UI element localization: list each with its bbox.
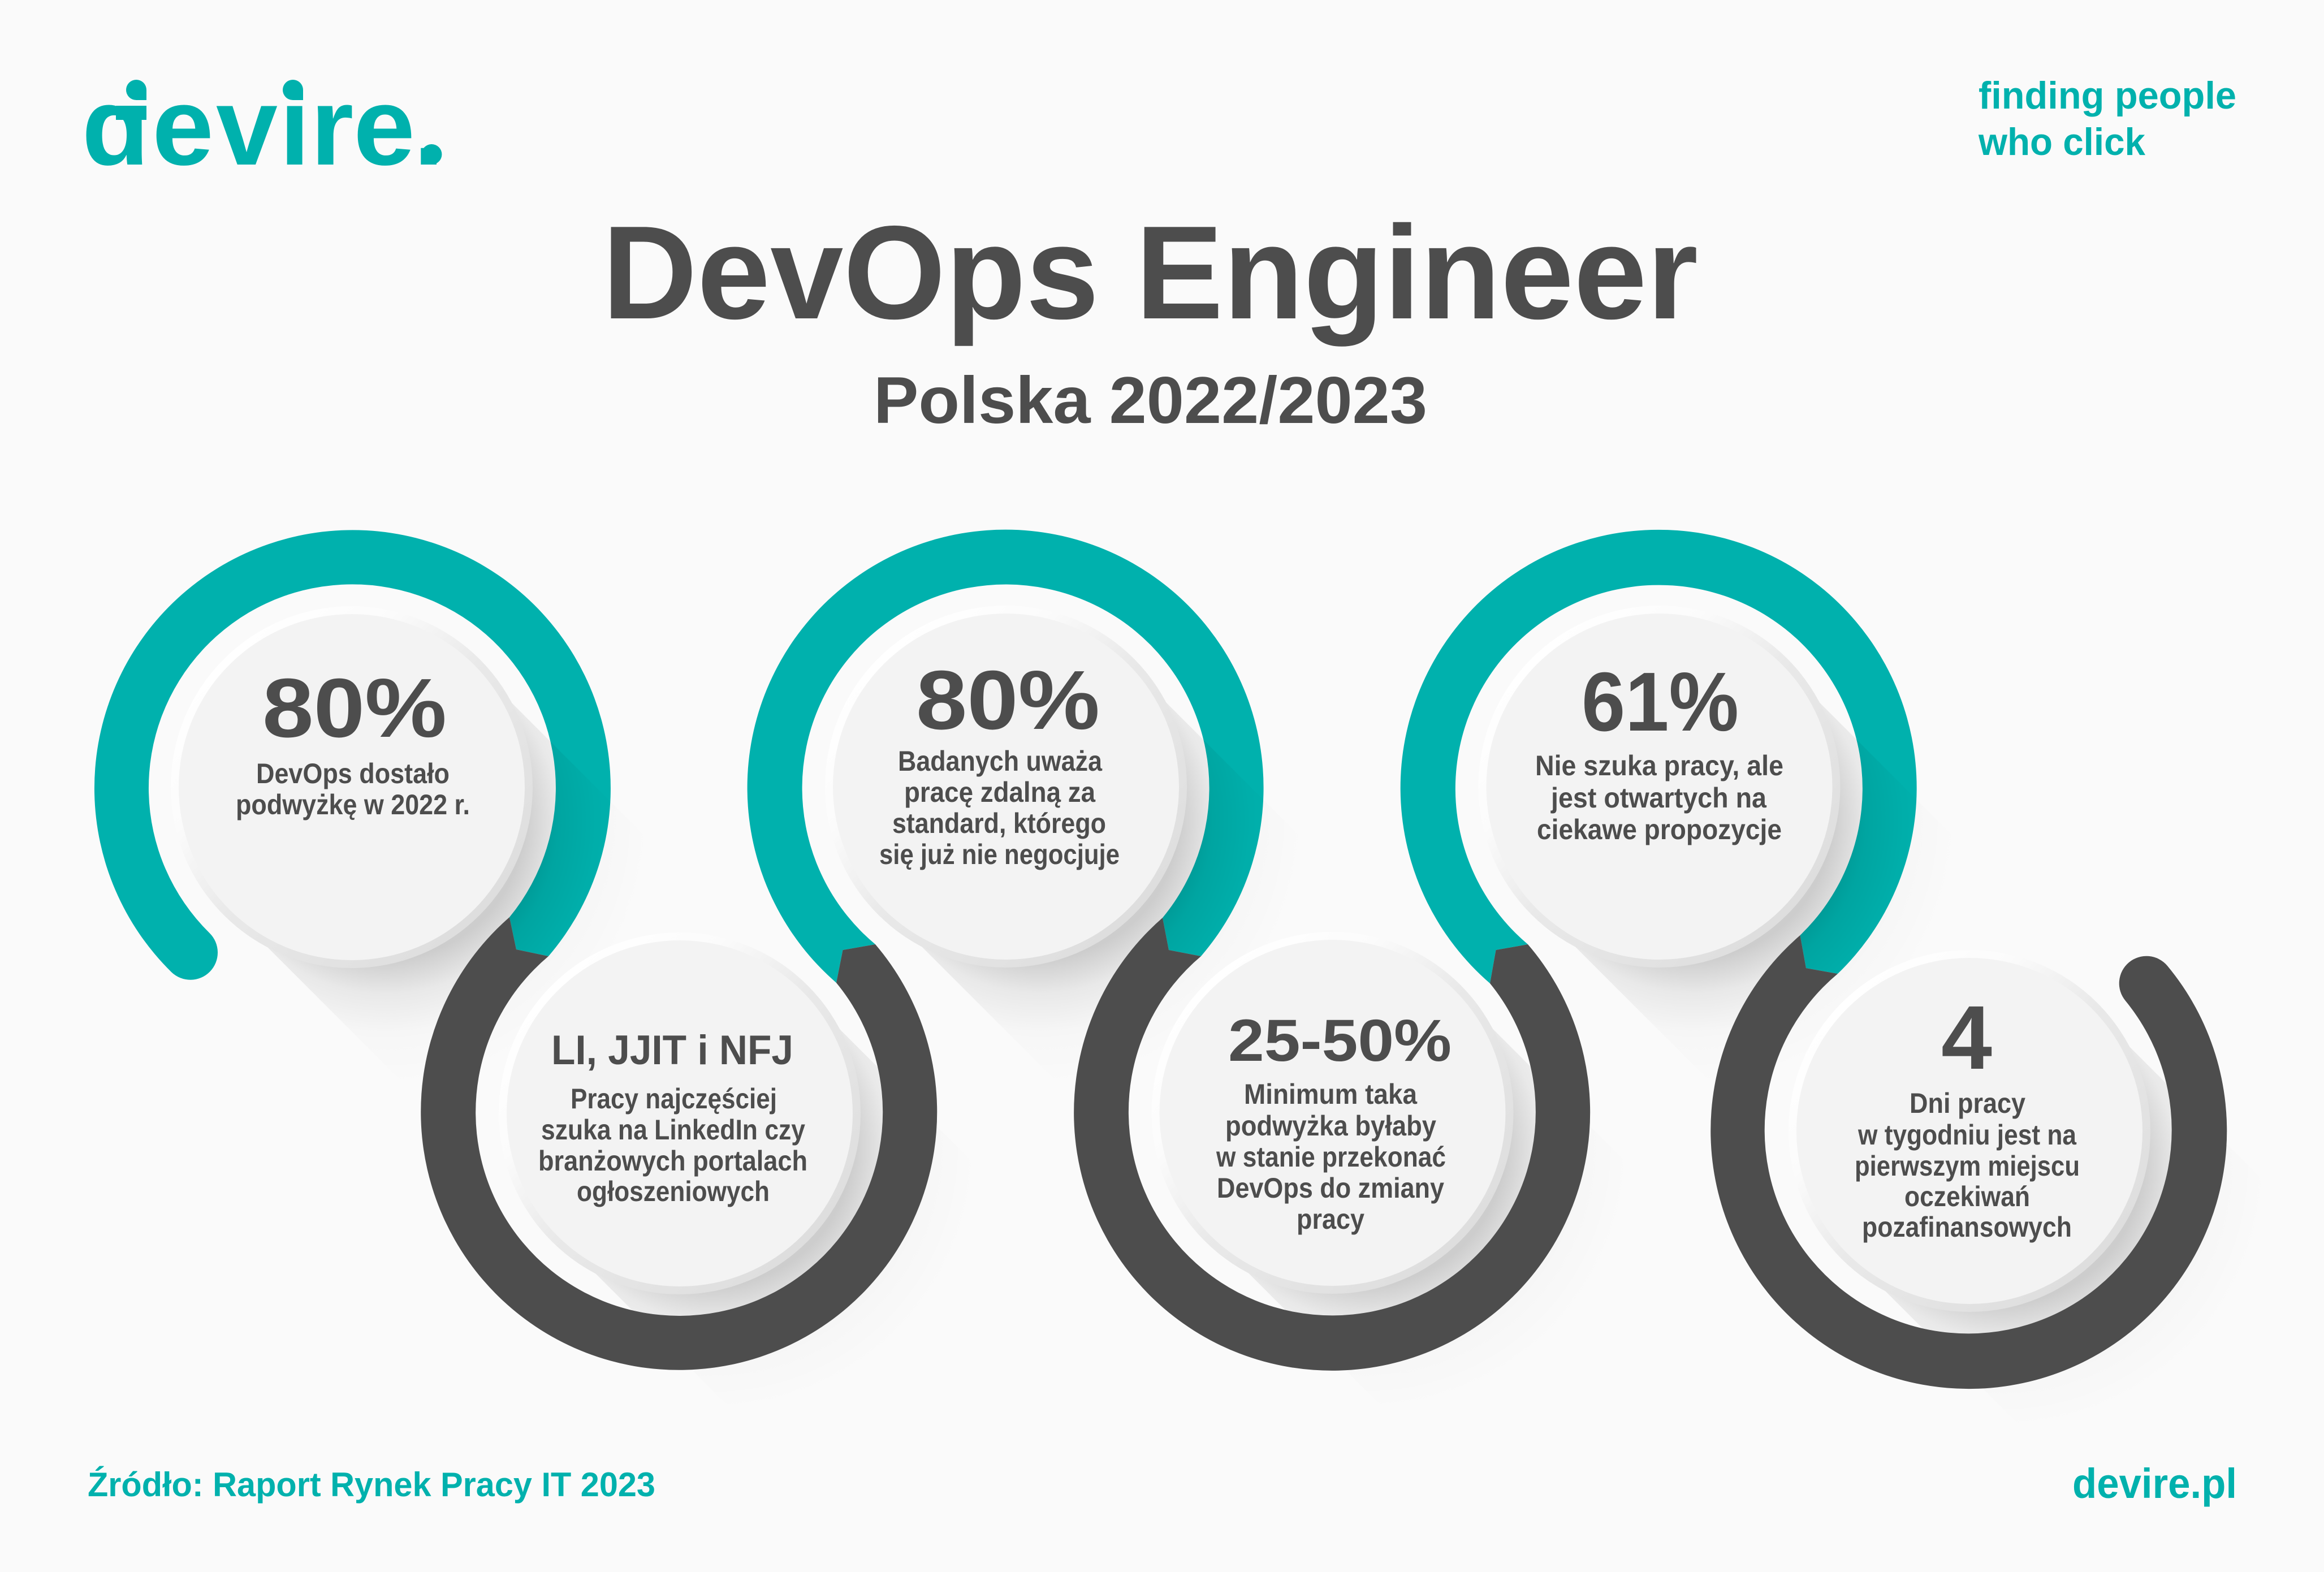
description: podwyżkę w 2022 r. <box>236 789 470 820</box>
panel: 4 days <box>1789 950 2150 1312</box>
stat: 61% <box>1582 655 1739 749</box>
description: ogłoszeniowych <box>577 1176 770 1207</box>
description <box>1535 750 1783 845</box>
description: jest otwartych na <box>1550 782 1767 814</box>
stat: 80% <box>262 662 447 755</box>
description <box>1216 1078 1446 1235</box>
panel: 25-50% <box>1151 932 1513 1294</box>
dark ring segments <box>421 917 2227 1389</box>
tagline <box>1978 74 2236 163</box>
title: DevOps Engineer <box>602 198 1698 347</box>
teal ring segments <box>94 530 1917 983</box>
description: Dni pracy <box>1910 1087 2025 1119</box>
description <box>236 758 470 820</box>
ring: dark 1 <box>421 917 937 1370</box>
description: ciekawe propozycje <box>1537 814 1782 845</box>
description: oczekiwań <box>1904 1181 2030 1212</box>
panel: 80% raise <box>171 606 533 968</box>
description <box>1855 1087 2080 1243</box>
description: podwyżka byłaby <box>1225 1110 1436 1142</box>
description: Badanych uważa <box>898 745 1103 777</box>
stat: LI, JJIT i NFJ <box>551 1027 793 1073</box>
description: DevOps do zmiany <box>1217 1172 1444 1204</box>
disc shadows <box>230 664 2324 1570</box>
subtitle: Polska 2022/2023 <box>874 363 1427 437</box>
stat: 80% <box>916 654 1100 747</box>
source note: Źródło: Raport Rynek Pracy IT 2023 <box>88 1466 655 1504</box>
description <box>879 745 1120 870</box>
description: pozafinansowych <box>1862 1211 2072 1243</box>
ring: teal 1 <box>94 530 611 980</box>
stat: 4 <box>1941 987 1992 1088</box>
tagline: finding people <box>1979 74 2236 117</box>
description: szuka na LinkedIn czy <box>541 1114 805 1146</box>
ring: teal 3 <box>1401 530 1917 983</box>
panel: 61% <box>1478 606 1840 968</box>
tagline: who click <box>1978 120 2145 163</box>
description <box>538 1083 807 1207</box>
description: się już nie negocjuje <box>879 839 1120 870</box>
stat: 25-50% <box>1228 1008 1452 1074</box>
description: Nie szuka pracy, ale <box>1535 750 1783 781</box>
description: Pracy najczęściej <box>571 1083 777 1115</box>
ring: dark 2 <box>1074 918 1590 1371</box>
description: standard, którego <box>892 807 1106 839</box>
logo: devire: devire. <box>81 64 444 188</box>
panel: LI, JJIT i NFJ <box>499 932 861 1294</box>
description: pracy <box>1297 1203 1364 1235</box>
description: w tygodniu jest na <box>1858 1119 2077 1151</box>
description: Minimum taka <box>1244 1078 1418 1110</box>
description: DevOps dostało <box>256 758 450 789</box>
description: pracę zdalną za <box>904 776 1096 808</box>
description: pierwszym miejscu <box>1855 1150 2080 1182</box>
ring: teal 2 <box>748 530 1264 983</box>
description: branżowych portalach <box>538 1145 807 1177</box>
website: devire.pl <box>2072 1460 2237 1507</box>
panel: 80% remote <box>825 606 1187 968</box>
description: w stanie przekonać <box>1216 1141 1446 1173</box>
ring: dark 3 <box>1710 935 2227 1389</box>
